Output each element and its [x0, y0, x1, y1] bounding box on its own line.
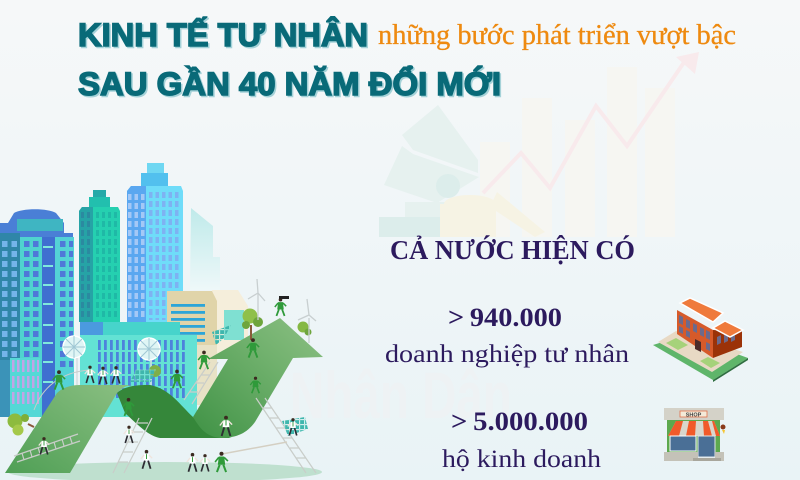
stat: household businesses: > 5.000.000: [451, 407, 588, 436]
watermark chart: bars, rising arrow, banknotes and coins: [379, 52, 699, 237]
watermark: Nhân Dân: Nhân Dân: [290, 358, 512, 432]
hill-top turbines: [248, 279, 316, 343]
stat: household businesses: [442, 407, 602, 473]
icon: isometric company building: [653, 298, 748, 382]
trees: [8, 308, 312, 436]
pale background building: [190, 208, 220, 290]
people: [39, 296, 298, 472]
stat: private enterprises: > 940.000: [448, 303, 562, 332]
icon: shop: SHOP: [686, 412, 702, 418]
title line 2: SAU GẦN 40 NĂM ĐỔI MỚI: [78, 66, 501, 102]
teal tower: [79, 190, 120, 322]
green ribbon: rising left section: [5, 385, 135, 473]
dark ribbon: middle dip: [117, 385, 232, 438]
growth arrow head and shaft: [193, 318, 323, 438]
title line 1: KINH TẾ TƯ NHÂN: [78, 17, 368, 53]
ladders: [14, 362, 316, 473]
low teal building: [80, 322, 197, 417]
illustration: green city and growth arrow: [0, 163, 323, 480]
subtitle: những bước phát triển vượt bậc: [378, 20, 736, 51]
stat: household businesses: hộ kinh doanh: [442, 446, 602, 473]
cream building: [212, 290, 248, 356]
ground ellipse: [8, 462, 322, 480]
icon: shop: [664, 408, 726, 461]
stat: private enterprises: [385, 303, 630, 368]
title line 1: KINH TẾ TƯ NHÂN: [80, 18, 370, 54]
blue tower: [127, 163, 183, 322]
beige building: [167, 291, 217, 405]
title line 2: SAU GẦN 40 NĂM ĐỔI MỚI: [80, 68, 502, 104]
stat: private enterprises: doanh nghiệp tư nhân: [385, 341, 630, 368]
rope: [222, 442, 287, 454]
solar panels: [130, 325, 308, 436]
left skyscraper: [0, 209, 74, 417]
heading: CẢ NƯỚC HIỆN CÓ: CẢ NƯỚC HIỆN CÓ: [390, 235, 635, 265]
wind turbines on roof: [63, 336, 160, 385]
